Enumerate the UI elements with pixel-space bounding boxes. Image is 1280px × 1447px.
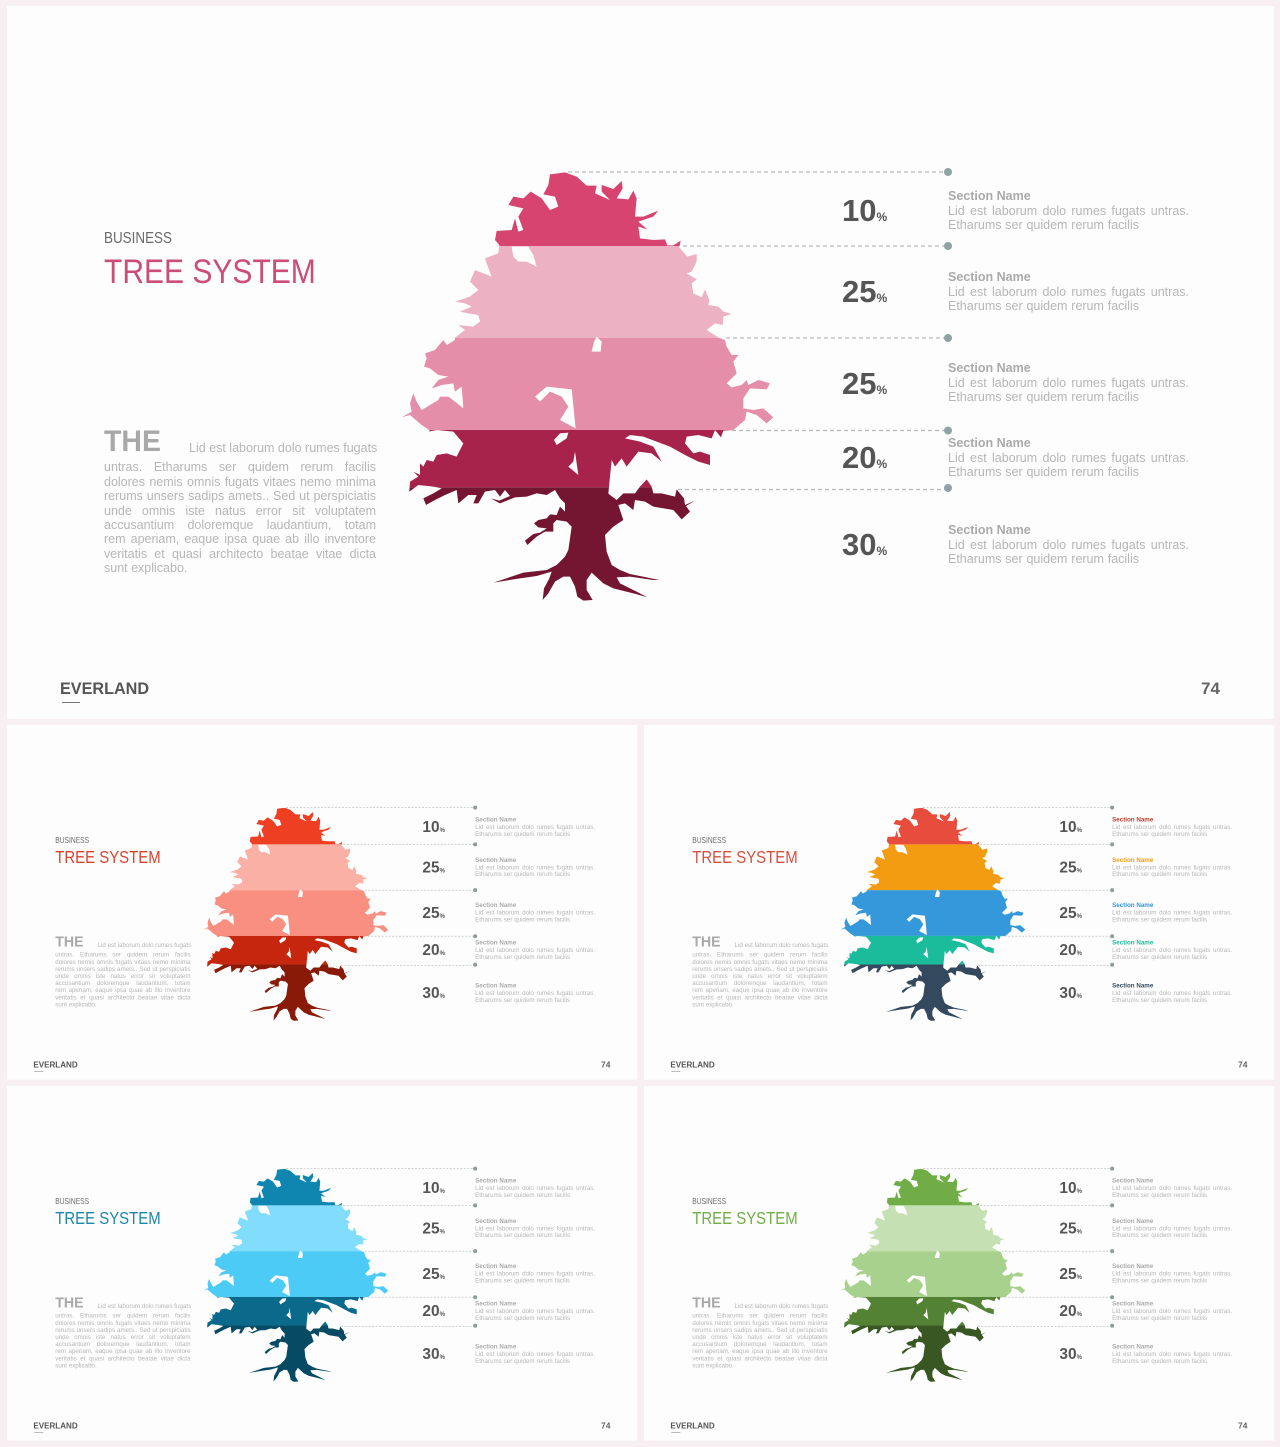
section 4 text: Lid est laborum dolo rumes fugats untras.: [475, 947, 595, 954]
chart: green layered tree with leader lines: [840, 1166, 1114, 1382]
number: 30%: 30%: [842, 527, 887, 562]
section 5 text: [1112, 983, 1232, 1004]
text block: intro: untras. Etharums ser quidem rerum facilis: [104, 460, 376, 474]
section 2 text: Section Name: [948, 270, 1031, 284]
section 4 text: Etharums ser quidem rerum facilis: [948, 465, 1139, 479]
section 1 text: Section Name: [475, 1178, 516, 1185]
section 5 text: Etharums ser quidem rerum facilis: [475, 997, 570, 1004]
section 2 text: [1112, 1218, 1232, 1239]
page number: 74: [601, 1060, 610, 1070]
text block: intro: [104, 425, 377, 575]
chart: blue layered tree with leader lines: [204, 1166, 478, 1382]
number: 25%: 25%: [422, 859, 445, 876]
section 5 text: Section Name: [475, 1344, 516, 1351]
section 5 text: [1112, 1344, 1232, 1365]
text block: intro: accusantium doloremque laudantium, totam: [55, 1341, 191, 1348]
chart: multicolour layered tree with leader lines: [840, 806, 1114, 1021]
panel: multicolour tree slide: [644, 725, 1274, 1080]
section 1 text: Section Name: [475, 817, 516, 824]
section 5 text: Etharums ser quidem rerum facilis: [948, 552, 1139, 566]
text block: intro: rerums unsers sadips amets.. Sed ut perspiciatis: [55, 1327, 191, 1334]
section 2 text: [1112, 857, 1232, 878]
text block: intro: Lid est laborum dolo rumes fugats: [734, 942, 828, 949]
section 1 text: Lid est laborum dolo rumes fugats untras.: [1112, 1185, 1232, 1192]
text block: intro: sunt explicabo.: [692, 1363, 733, 1370]
text block: intro: unde omnis iste natus error sit voluptatem: [104, 504, 376, 518]
section 3 text: [1112, 902, 1232, 924]
number: 30%: 30%: [422, 1345, 445, 1363]
text block: intro: rem aperiam, eaque ipsa quae ab illo inventore: [55, 987, 191, 994]
text block: intro: sunt explicabo.: [104, 561, 187, 575]
number: 25%: 25%: [422, 1266, 445, 1283]
text block: intro: dolores nemis omnis fugats vitaes nemo minima: [692, 959, 827, 966]
section 2 text: Lid est laborum dolo rumes fugats untras.: [475, 864, 595, 871]
text block: intro: Lid est laborum dolo rumes fugats: [734, 1303, 828, 1310]
text block: intro: THE: [55, 934, 84, 950]
text block: intro: unde omnis iste natus error sit voluptatem: [55, 1334, 191, 1341]
text block: intro: rem aperiam, eaque ipsa quae ab illo inventore: [692, 1348, 827, 1355]
text block: intro: [692, 1296, 827, 1371]
page number: 74: [601, 1421, 610, 1431]
section 1 text: [475, 817, 595, 838]
section 4 text: Section Name: [1112, 1301, 1153, 1307]
section 5 text: Etharums ser quidem rerum facilis: [1112, 1358, 1207, 1365]
text block: intro: veritatis et quasi architecto beatae vitae dicta: [692, 1355, 827, 1362]
text block: intro: veritatis et quasi architecto beatae vitae dicta: [104, 547, 376, 561]
section 5 text: [475, 1344, 595, 1365]
number: 20%: 20%: [1059, 941, 1081, 959]
text block: intro: untras. Etharums ser quidem rerum facilis: [55, 1312, 191, 1319]
section 5 text: Lid est laborum dolo rumes fugats untras.: [948, 538, 1189, 552]
text block: intro: [55, 1295, 191, 1370]
section 5 text: Etharums ser quidem rerum facilis: [475, 1358, 570, 1365]
section 1 text: Etharums ser quidem rerum facilis: [1112, 1192, 1207, 1199]
number: 10%: 10%: [422, 1180, 445, 1197]
section 3 text: Lid est laborum dolo rumes fugats untras.: [475, 910, 595, 917]
section 1 text: Section Name: [1112, 1178, 1153, 1185]
section 2 text: Section Name: [475, 857, 516, 864]
section 3 text: [1112, 1264, 1232, 1285]
footer brand: EVERLAND: [33, 1061, 78, 1070]
text block: intro: dolores nemis omnis fugats vitaes nemo minima: [104, 475, 376, 489]
label: business: BUSINESS: [55, 837, 89, 845]
number: 25%: 25%: [842, 366, 887, 401]
section 4 text: Lid est laborum dolo rumes fugats untras.: [1112, 1308, 1232, 1315]
number: 30%: 30%: [422, 984, 445, 1002]
number: 20%: 20%: [422, 941, 445, 959]
label: business: BUSINESS: [104, 230, 172, 246]
section 2 text: [475, 857, 595, 878]
text block: intro: rerums unsers sadips amets.. Sed ut perspiciatis: [692, 966, 827, 973]
number: 25%: 25%: [842, 274, 887, 309]
section 2 text: Lid est laborum dolo rumes fugats untras.: [475, 1225, 595, 1232]
section 4 text: Lid est laborum dolo rumes fugats untras.: [475, 1308, 595, 1315]
footer brand: EVERLAND: [60, 680, 149, 698]
section 1 text: [1112, 1178, 1232, 1199]
section 2 text: Lid est laborum dolo rumes fugats untras.: [1112, 864, 1232, 871]
section 2 text: Section Name: [1112, 1218, 1153, 1225]
section 4 text: [475, 1301, 595, 1322]
section 4 text: Etharums ser quidem rerum facilis: [475, 1315, 570, 1322]
section 3 text: Etharums ser quidem rerum facilis: [475, 1278, 570, 1285]
section 4 text: Section Name: [475, 940, 516, 946]
heading: tree system: TREE SYSTEM: [55, 848, 161, 867]
section 5 text: [475, 983, 595, 1004]
section 3 text: Section Name: [1112, 1263, 1153, 1270]
number: 20%: 20%: [842, 440, 887, 475]
section 3 text: [475, 1263, 595, 1285]
section 5 text: Section Name: [475, 983, 516, 990]
section 1 text: Section Name: [948, 189, 1031, 203]
section 2 text: Section Name: [1112, 857, 1153, 864]
text block: intro: dolores nemis omnis fugats vitaes nemo minima: [55, 959, 191, 966]
text block: intro: rem aperiam, eaque ipsa quae ab illo inventore: [104, 532, 376, 546]
section 5 text: Lid est laborum dolo rumes fugats untras.: [475, 990, 595, 997]
section 2 text: Etharums ser quidem rerum facilis: [475, 1232, 570, 1239]
text block: intro: accusantium doloremque laudantium, totam: [55, 980, 191, 987]
number: 10%: 10%: [842, 193, 887, 228]
section 4 text: [948, 436, 1189, 479]
section 2 text: Lid est laborum dolo rumes fugats untras.: [1112, 1225, 1232, 1232]
text block: intro: accusantium doloremque laudantium, totam: [104, 518, 376, 532]
number: 25%: 25%: [1059, 905, 1081, 922]
section 2 text: Etharums ser quidem rerum facilis: [475, 871, 570, 878]
label: business: BUSINESS: [55, 1198, 89, 1206]
text block: intro: rem aperiam, eaque ipsa quae ab illo inventore: [692, 987, 827, 994]
section 3 text: [948, 361, 1189, 404]
section 2 text: Etharums ser quidem rerum facilis: [1112, 1232, 1207, 1239]
section 1 text: [1112, 817, 1232, 838]
text block: intro: Lid est laborum dolo rumes fugats: [189, 441, 377, 455]
text block: intro: veritatis et quasi architecto beatae vitae dicta: [55, 1355, 191, 1362]
section 2 text: Etharums ser quidem rerum facilis: [1112, 871, 1207, 878]
number: 20%: 20%: [422, 1302, 445, 1320]
section 4 text: Lid est laborum dolo rumes fugats untras.: [948, 451, 1189, 465]
text block: intro: dolores nemis omnis fugats vitaes nemo minima: [692, 1320, 827, 1327]
text block: intro: [55, 934, 191, 1009]
text block: intro: Lid est laborum dolo rumes fugats: [98, 942, 191, 949]
section 3 text: Etharums ser quidem rerum facilis: [1112, 1278, 1207, 1285]
text block: intro: rerums unsers sadips amets.. Sed ut perspiciatis: [692, 1327, 827, 1334]
text block: intro: Lid est laborum dolo rumes fugats: [98, 1303, 191, 1310]
section 2 text: [475, 1218, 595, 1239]
heading: tree system: TREE SYSTEM: [55, 1209, 161, 1228]
chart: red layered tree with leader lines: [204, 806, 478, 1021]
number: 10%: 10%: [1059, 1180, 1081, 1197]
section 3 text: Section Name: [475, 1263, 516, 1270]
number: 25%: 25%: [1059, 1266, 1081, 1283]
section 5 text: Lid est laborum dolo rumes fugats untras.: [1112, 1351, 1232, 1358]
footer brand: EVERLAND: [670, 1422, 714, 1431]
section 3 text: Section Name: [1112, 902, 1153, 909]
section 1 text: Lid est laborum dolo rumes fugats untras.: [475, 824, 595, 831]
section 4 text: Etharums ser quidem rerum facilis: [475, 954, 570, 961]
text block: intro: THE: [104, 425, 161, 458]
section 2 text: Section Name: [475, 1218, 516, 1225]
text block: intro: dolores nemis omnis fugats vitaes nemo minima: [55, 1320, 191, 1327]
text block: intro: rerums unsers sadips amets.. Sed ut perspiciatis: [104, 489, 376, 503]
section 2 text: [948, 270, 1189, 313]
text block: intro: unde omnis iste natus error sit voluptatem: [692, 1334, 827, 1341]
section 5 text: Section Name: [1112, 983, 1153, 990]
panel: blue tree slide: [7, 1086, 637, 1441]
text block: intro: veritatis et quasi architecto beatae vitae dicta: [55, 994, 191, 1001]
text block: intro: unde omnis iste natus error sit voluptatem: [55, 973, 191, 980]
heading: tree system: TREE SYSTEM: [104, 253, 316, 291]
text block: intro: rerums unsers sadips amets.. Sed ut perspiciatis: [55, 966, 191, 973]
text block: intro: THE: [692, 1295, 720, 1311]
section 2 text: Etharums ser quidem rerum facilis: [948, 299, 1139, 313]
section 1 text: [948, 189, 1189, 232]
section 3 text: Lid est laborum dolo rumes fugats untras.: [1112, 1271, 1232, 1278]
section 1 text: Lid est laborum dolo rumes fugats untras.: [948, 204, 1189, 218]
section 3 text: [475, 902, 595, 924]
section 4 text: [1112, 1301, 1232, 1322]
text block: intro: sunt explicabo.: [55, 1002, 97, 1009]
text block: intro: THE: [55, 1295, 84, 1311]
section 3 text: Lid est laborum dolo rumes fugats untras.: [948, 376, 1189, 390]
text block: intro: rem aperiam, eaque ipsa quae ab illo inventore: [55, 1348, 191, 1355]
text block: intro: [692, 934, 828, 1009]
section 3 text: Lid est laborum dolo rumes fugats untras.: [475, 1271, 595, 1278]
section 3 text: Lid est laborum dolo rumes fugats untras.: [1112, 910, 1232, 917]
section 4 text: Etharums ser quidem rerum facilis: [1112, 954, 1207, 961]
section 4 text: Section Name: [475, 1301, 516, 1307]
section 3 text: Section Name: [475, 902, 516, 909]
text block: intro: accusantium doloremque laudantium, totam: [692, 1341, 827, 1348]
label: business: BUSINESS: [692, 837, 726, 845]
section 4 text: [1112, 940, 1232, 961]
section 5 text: [948, 523, 1189, 566]
page number: 74: [1238, 1060, 1247, 1070]
section 4 text: Section Name: [948, 436, 1031, 450]
section 1 text: Etharums ser quidem rerum facilis: [475, 1192, 570, 1199]
section 1 text: [475, 1178, 595, 1199]
text block: intro: veritatis et quasi architecto beatae vitae dicta: [692, 994, 827, 1001]
number: 25%: 25%: [1059, 1220, 1081, 1237]
number: 20%: 20%: [1059, 1302, 1081, 1320]
section 3 text: Etharums ser quidem rerum facilis: [1112, 917, 1207, 924]
number: 30%: 30%: [1059, 984, 1081, 1002]
number: 25%: 25%: [1059, 859, 1081, 876]
label: business: BUSINESS: [692, 1198, 726, 1206]
section 5 text: Section Name: [1112, 1344, 1153, 1351]
section 4 text: [475, 940, 595, 961]
text block: intro: untras. Etharums ser quidem rerum facilis: [692, 1312, 827, 1319]
number: 10%: 10%: [422, 819, 445, 836]
text block: intro: sunt explicabo.: [692, 1002, 733, 1009]
number: 30%: 30%: [1059, 1345, 1081, 1363]
section 5 text: Lid est laborum dolo rumes fugats untras.: [1112, 990, 1232, 997]
text block: intro: untras. Etharums ser quidem rerum facilis: [55, 951, 191, 958]
text block: intro: THE: [692, 934, 720, 950]
number: 25%: 25%: [422, 905, 445, 922]
section 3 text: Section Name: [948, 361, 1031, 375]
section 4 text: Etharums ser quidem rerum facilis: [1112, 1315, 1207, 1322]
page number: 74: [1238, 1421, 1247, 1431]
panel: green tree slide: [644, 1086, 1274, 1441]
footer brand: EVERLAND: [33, 1422, 78, 1431]
section 1 text: Section Name: [1112, 817, 1153, 824]
chart: pink layered tree with leader lines: [402, 168, 952, 601]
panel: red tree slide: [7, 725, 637, 1080]
text block: intro: sunt explicabo.: [55, 1363, 97, 1370]
section 5 text: Etharums ser quidem rerum facilis: [1112, 997, 1207, 1004]
panel: pink tree slide: [7, 6, 1274, 719]
section 1 text: Etharums ser quidem rerum facilis: [1112, 831, 1207, 838]
text block: intro: accusantium doloremque laudantium, totam: [692, 980, 827, 987]
section 3 text: Etharums ser quidem rerum facilis: [475, 917, 570, 924]
number: 10%: 10%: [1059, 819, 1081, 836]
number: 25%: 25%: [422, 1220, 445, 1237]
section 1 text: Lid est laborum dolo rumes fugats untras.: [475, 1185, 595, 1192]
text block: intro: untras. Etharums ser quidem rerum facilis: [692, 951, 827, 958]
heading: tree system: TREE SYSTEM: [692, 848, 797, 867]
footer brand: EVERLAND: [670, 1061, 714, 1070]
section 1 text: Lid est laborum dolo rumes fugats untras.: [1112, 824, 1232, 831]
section 4 text: Section Name: [1112, 940, 1153, 946]
section 3 text: Etharums ser quidem rerum facilis: [948, 390, 1139, 404]
section 4 text: Lid est laborum dolo rumes fugats untras.: [1112, 947, 1232, 954]
section 5 text: Lid est laborum dolo rumes fugats untras.: [475, 1351, 595, 1358]
section 1 text: Etharums ser quidem rerum facilis: [948, 218, 1139, 232]
text block: intro: unde omnis iste natus error sit voluptatem: [692, 973, 827, 980]
section 2 text: Lid est laborum dolo rumes fugats untras.: [948, 285, 1189, 299]
section 1 text: Etharums ser quidem rerum facilis: [475, 831, 570, 838]
section 5 text: Section Name: [948, 523, 1031, 537]
page number: 74: [1201, 679, 1220, 698]
heading: tree system: TREE SYSTEM: [692, 1209, 797, 1228]
